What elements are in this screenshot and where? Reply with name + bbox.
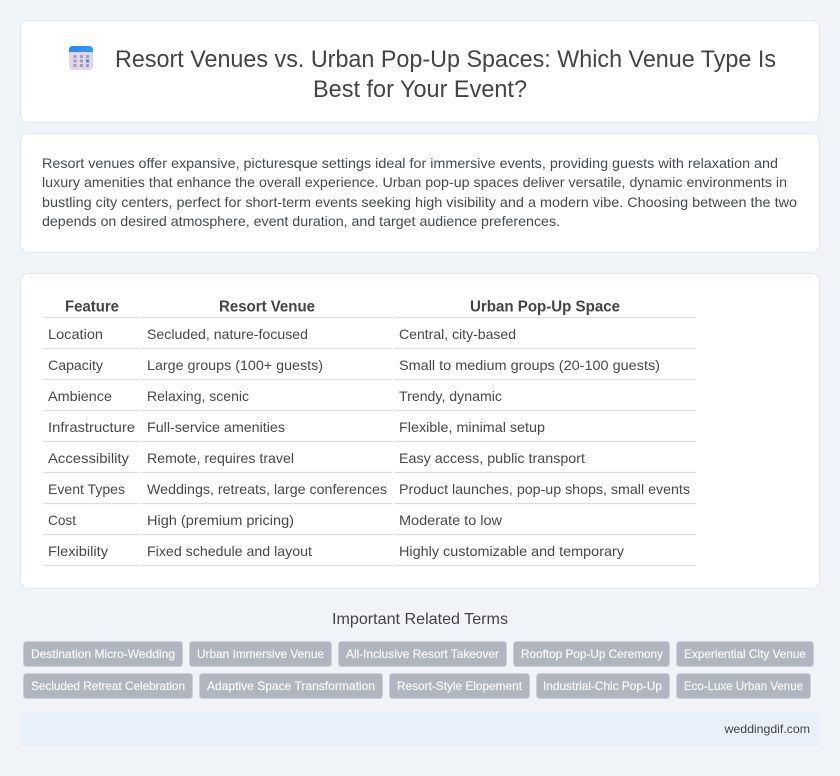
table row: flexibility: Flexibility xyxy=(48,543,108,559)
table row: cost: Cost xyxy=(48,512,76,528)
table row: infrastructure xyxy=(48,419,545,435)
table row: accessibility: Easy access, public transport xyxy=(399,450,585,466)
footer bar xyxy=(20,712,820,746)
table row: flexibility: Highly customizable and temporary xyxy=(399,543,624,559)
panel: header xyxy=(20,20,820,122)
tags: related terms: Resort-Style Elopement xyxy=(397,679,523,693)
tags: related terms: Rooftop Pop-Up Ceremony xyxy=(521,647,663,661)
text block: intro paragraph: Resort venues offer expansive, picturesque settings ideal for immersive events, providing guests with relaxation and xyxy=(42,155,778,171)
table header row: Feature xyxy=(65,298,119,316)
table row: accessibility: Remote, requires travel xyxy=(147,450,294,466)
text block: intro paragraph xyxy=(42,155,797,229)
table row: ambience xyxy=(48,388,502,404)
table header row xyxy=(65,298,620,316)
title xyxy=(115,46,776,103)
tags: related terms: Urban Immersive Venue xyxy=(197,647,324,661)
table row: ambience: Ambience xyxy=(48,388,112,404)
table row: cost xyxy=(48,512,503,528)
table row: capacity: Small to medium groups (20-100 guests) xyxy=(399,357,660,373)
tags: related terms: Adaptive Space Transformation xyxy=(207,679,375,693)
table row: ambience: Trendy, dynamic xyxy=(399,388,502,404)
tags: related terms: Experiential City Venue xyxy=(684,647,806,661)
tags: related terms: All-Inclusive Resort Takeover xyxy=(346,647,499,661)
table row: capacity: Capacity xyxy=(48,357,103,373)
table header row: Resort Venue xyxy=(219,298,315,316)
panel: comparison table xyxy=(20,274,820,588)
table row: capacity: Large groups (100+ guests) xyxy=(147,357,323,373)
table row: cost: High (premium pricing) xyxy=(147,512,294,528)
table row: location: Central, city-based xyxy=(399,326,516,342)
table row: event types: Weddings, retreats, large conferences xyxy=(147,481,387,497)
table row: cost: Moderate to low xyxy=(399,512,503,528)
table row: infrastructure: Flexible, minimal setup xyxy=(399,419,545,435)
table row: event types: Product launches, pop-up shops, small events xyxy=(399,481,690,497)
table row: location: Secluded, nature-focused xyxy=(147,326,308,342)
panel: intro text xyxy=(20,134,820,252)
icon: calendar xyxy=(69,46,93,70)
table row: flexibility: Fixed schedule and layout xyxy=(147,543,312,559)
tags: related terms: Destination Micro-Wedding xyxy=(31,647,175,661)
tags: related terms: Eco-Luxe Urban Venue xyxy=(684,679,803,693)
table row: event types: Event Types xyxy=(48,481,125,497)
text block: intro paragraph: luxury amenities that enhance the overall experience. Urban pop-up spaces deliver versatile, dynamic environments in xyxy=(42,174,787,190)
tags: related terms: Secluded Retreat Celebration xyxy=(31,679,185,693)
tags: related terms: Industrial-Chic Pop-Up xyxy=(543,679,662,693)
table row: ambience: Relaxing, scenic xyxy=(147,388,249,404)
table row: location xyxy=(48,326,516,342)
text block: intro paragraph: bustling city centers, perfect for short-term events seeking high visibility and a modern vibe. Choosing between the two xyxy=(42,194,797,210)
text block: intro paragraph: depends on desired atmosphere, event duration, and target audience preferences. xyxy=(42,213,560,229)
table row: infrastructure: Full-service amenities xyxy=(147,419,285,435)
table row: accessibility: Accessibility xyxy=(48,450,129,466)
title: Resort Venues vs. Urban Pop-Up Spaces: Which Venue Type Is xyxy=(115,46,776,73)
tags: related terms xyxy=(24,642,814,698)
table row: accessibility xyxy=(48,450,585,466)
table row: flexibility xyxy=(48,543,624,559)
table row: capacity xyxy=(48,357,660,373)
table header row: Urban Pop-Up Space xyxy=(470,298,620,316)
title: Best for Your Event? xyxy=(313,76,527,103)
heading: related terms: Important Related Terms xyxy=(332,611,508,628)
table row: location: Location xyxy=(48,326,103,342)
table row: infrastructure: Infrastructure xyxy=(48,419,135,435)
footer bar: weddingdif.com xyxy=(723,722,810,736)
table row: event types xyxy=(48,481,690,497)
